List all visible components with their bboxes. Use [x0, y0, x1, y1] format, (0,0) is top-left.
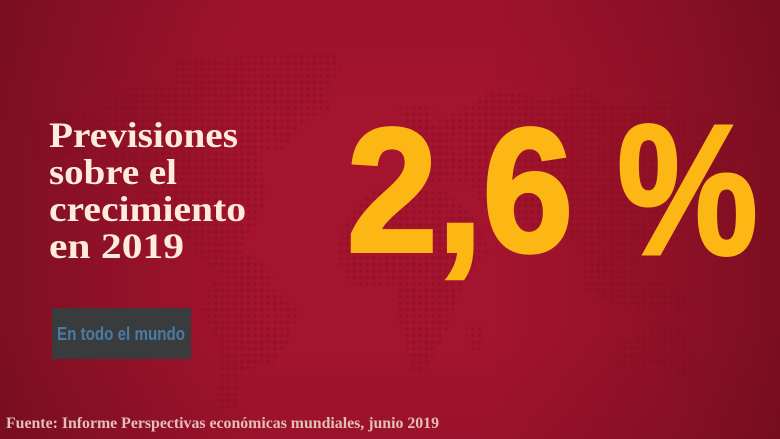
label box: En todo el mundo: En todo el mundo: [57, 324, 185, 344]
map: Madagascar: [466, 325, 482, 350]
world map of dots: [30, 54, 775, 410]
heading: sobre el: [49, 152, 177, 192]
map: Southeast Asia: [585, 262, 700, 312]
big number: [347, 87, 758, 294]
heading: [49, 115, 246, 266]
heading: en 2019: [49, 226, 184, 266]
big number: %: [617, 87, 758, 294]
map: North America: [30, 54, 342, 282]
map: Africa: [338, 188, 490, 370]
source note: Fuente: Informe Perspectivas económicas mundiales, junio 2019: [6, 415, 439, 432]
map: Europe and Asia: [400, 85, 775, 280]
map: Australia: [617, 318, 697, 387]
heading: crecimiento: [49, 189, 246, 229]
label box: En todo el mundo: [52, 308, 191, 359]
map: South America: [200, 280, 302, 410]
big number: 2,6: [347, 93, 573, 289]
heading: Previsiones: [49, 115, 238, 155]
